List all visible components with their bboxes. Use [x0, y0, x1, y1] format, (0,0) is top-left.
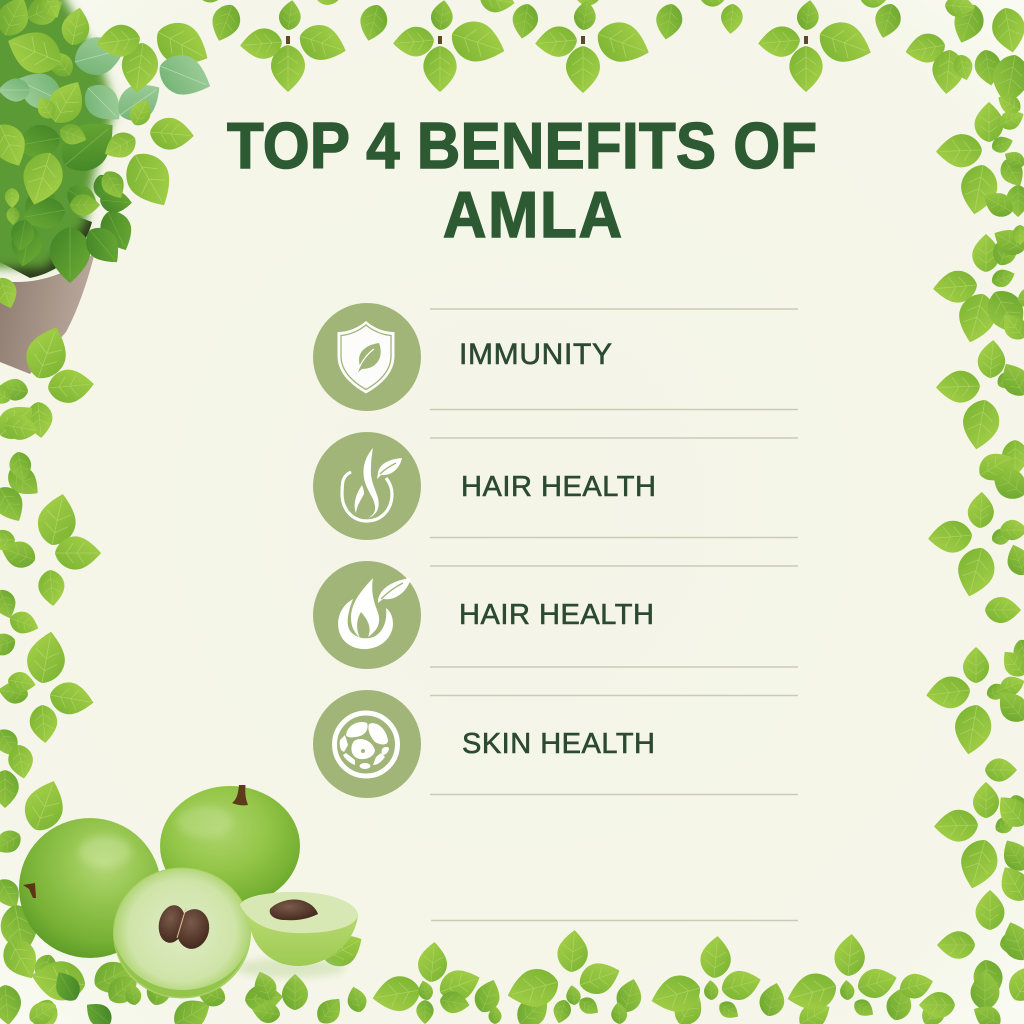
fruit shadow: [235, 958, 345, 978]
leaf cluster: [924, 647, 1010, 757]
fruit calyx: [23, 883, 36, 898]
plant soil: [0, 210, 92, 278]
label: HAIR HEALTH: [461, 471, 656, 503]
amla fruit group: [19, 785, 358, 998]
leaf cluster: [757, 0, 877, 92]
bottom rule: [431, 920, 798, 922]
leaf cluster: [935, 102, 1024, 217]
icon badge: skin cells: [313, 690, 421, 798]
leaf cluster: [783, 933, 900, 1021]
title: TOP 4 BENEFITS OF: [227, 110, 817, 183]
icon badge: shield with leaf: [313, 303, 421, 411]
bottom-right foliage: [919, 860, 1024, 1024]
leaf cluster: [932, 234, 1024, 347]
label: IMMUNITY: [459, 338, 612, 371]
leaf cluster: [935, 339, 1021, 452]
leaf cluster: [933, 782, 1019, 893]
potted plant, top left: [0, 0, 217, 374]
icon badge: hair strand with leaf: [313, 432, 421, 540]
leaf border: right: [924, 90, 1024, 893]
rule lines: [430, 566, 798, 667]
label: HAIR HEALTH: [459, 599, 654, 631]
halved amla, front: [114, 868, 250, 998]
bottom-left foliage under the fruit: [0, 874, 369, 1024]
icon badge: flame with leaf: [313, 561, 421, 669]
benefit row: immunity: [313, 303, 798, 411]
benefit row: skin health: [313, 690, 798, 798]
leaf border: left: [0, 321, 101, 859]
label: SKIN HEALTH: [462, 728, 655, 760]
whole amla, left: [19, 818, 161, 958]
seed: [270, 899, 318, 920]
leaf cluster: [239, 0, 351, 92]
leaf border: bottom: [0, 860, 1024, 1024]
leaf cluster: [392, 0, 510, 92]
leaf cluster: [534, 0, 655, 93]
title: AMLA: [443, 179, 622, 252]
halved amla, right: [240, 892, 358, 966]
leaf cluster: [503, 929, 625, 1024]
whole amla, back: [160, 785, 300, 906]
benefit row: hair health, second: [313, 561, 798, 669]
leaf cluster: [647, 935, 764, 1023]
leaf cluster: [927, 491, 1015, 601]
benefit row: hair health: [313, 432, 798, 540]
leaf cluster: [0, 629, 96, 744]
leaf cluster: [370, 941, 485, 1024]
plant pot: [0, 252, 95, 374]
leaf cluster: [0, 321, 95, 439]
rule lines: [430, 696, 798, 794]
seed halves: [155, 903, 189, 945]
plant foliage mass: [0, 0, 115, 268]
fruit stem: [232, 785, 248, 805]
title: [227, 110, 817, 252]
rule lines: [430, 309, 798, 410]
rule lines: [430, 438, 798, 538]
leaf cluster: [0, 490, 101, 607]
leaf border: top: [37, 0, 1024, 107]
